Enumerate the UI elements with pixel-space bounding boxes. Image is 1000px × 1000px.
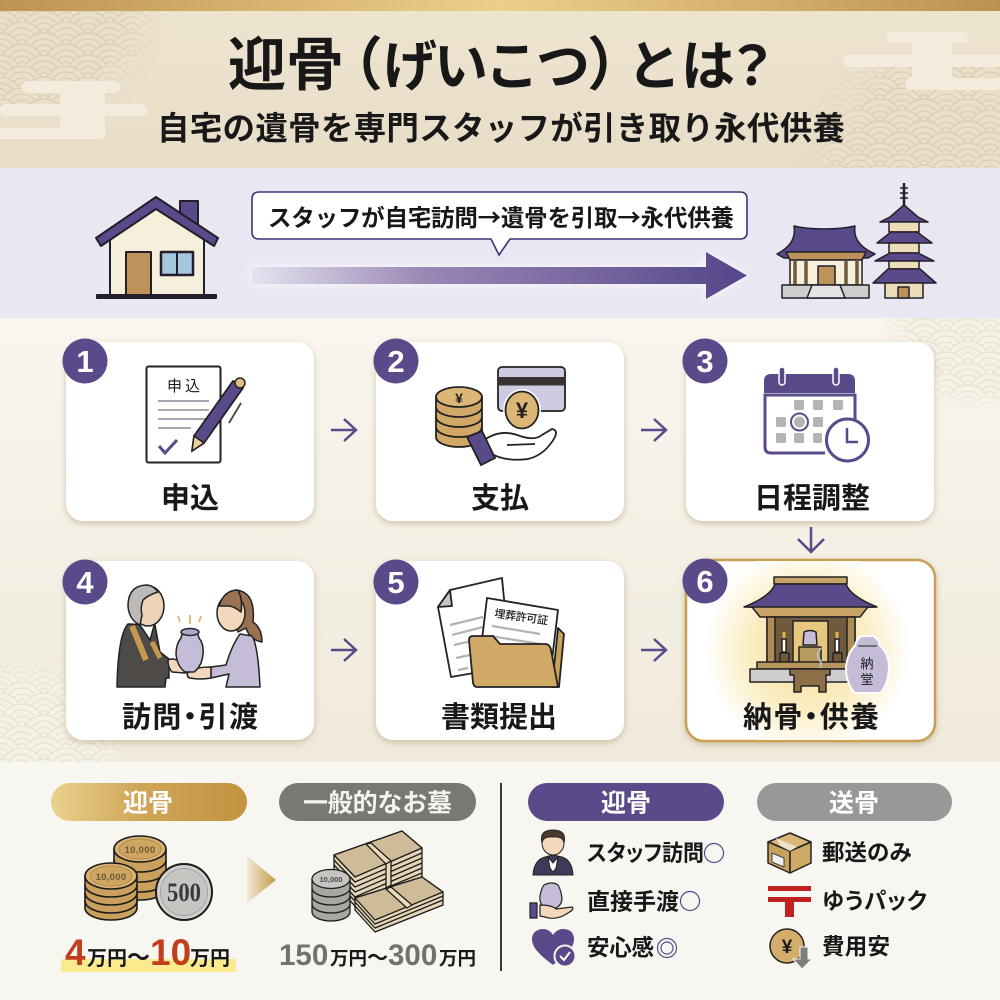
price: general grave: 〜	[367, 947, 388, 970]
title: 迎骨	[228, 33, 344, 98]
icon: hand holding urn	[530, 883, 573, 918]
icon: temple altar with urn: 納	[860, 656, 874, 671]
price: 迎骨: 万円	[190, 948, 230, 970]
arrow 3 to 6	[798, 527, 824, 552]
icon: gold coins: 500	[167, 878, 201, 907]
title: （	[325, 33, 383, 98]
text: direct handover: 直接手渡	[587, 888, 679, 914]
price: 迎骨: 万円	[87, 948, 127, 970]
label: 納骨・供養	[743, 701, 879, 734]
steps panel background	[0, 318, 1000, 762]
subtitle: 自宅の遺骨を専門スタッフが引き取り永代供養	[157, 110, 845, 146]
callout: スタッフが自宅訪問→遺骨を引取→永代供養	[268, 199, 734, 233]
divider	[500, 783, 502, 971]
price: general grave: 万円	[330, 948, 367, 969]
icon: yen coin with down arrow	[770, 929, 812, 969]
price: 迎骨	[61, 932, 236, 973]
mark: circle	[680, 892, 700, 910]
text: peace of mind: 安心感	[587, 936, 654, 960]
pill: 迎骨 comparison	[528, 783, 724, 821]
step number 6	[682, 558, 728, 604]
icon: documents and folder: 埋葬許可証	[494, 606, 549, 627]
icon: gold coins: 10,000	[96, 872, 126, 883]
step number 1: 1	[76, 344, 94, 379]
icon: application form and pen	[146, 366, 245, 462]
callout	[252, 192, 747, 255]
price: general grave: 万円	[439, 948, 476, 969]
step number 4: 4	[76, 565, 94, 600]
pill: 迎骨 cost: 迎骨	[123, 790, 173, 818]
step number 3	[682, 338, 728, 384]
icon: payment: ¥	[516, 398, 529, 423]
step number 2	[374, 338, 418, 384]
pill: general grave	[279, 783, 476, 821]
label: 訪問・引渡	[122, 701, 258, 734]
icon: payment	[436, 367, 565, 465]
icon: temple	[777, 226, 875, 298]
text: low cost: 費用安	[822, 935, 890, 960]
icon: temple altar with urn: 堂	[860, 672, 874, 687]
title: げいこつ	[383, 37, 590, 97]
gold arrow	[247, 856, 276, 903]
arrow 4 to 5	[331, 639, 356, 661]
step 2 card	[374, 338, 624, 521]
label: 支払	[471, 482, 529, 515]
icon: temple altar with urn	[744, 577, 888, 692]
step 4 card	[62, 560, 314, 740]
pill: 迎骨 comparison: 迎骨	[601, 790, 651, 818]
text: yu-pack: ゆうパック	[822, 889, 927, 914]
icon: postal mark	[768, 886, 811, 917]
icon: house	[96, 197, 218, 298]
step 6 highlighted card	[682, 547, 935, 753]
cost and comparison panel	[0, 762, 1000, 1000]
title: ？	[725, 37, 779, 97]
price: general grave: 300	[388, 939, 437, 972]
step 1 card	[62, 338, 314, 521]
title: とは	[627, 37, 735, 97]
icon: gold coins: 10,000	[125, 845, 155, 856]
arrow 5 to 6	[641, 639, 666, 661]
icon: documents and folder	[438, 578, 564, 687]
header panel	[0, 11, 1000, 168]
step number 3: 3	[696, 344, 714, 379]
step number 4	[62, 560, 108, 604]
icon: payment: ¥	[455, 390, 463, 406]
icon: calendar and clock	[764, 367, 868, 461]
mark: circle	[704, 844, 724, 862]
pill: 送骨 comparison: 送骨	[829, 790, 879, 818]
text: mail only: 郵送のみ	[822, 841, 912, 866]
title: ）	[587, 33, 645, 98]
step number 5	[374, 560, 418, 604]
icon: parcel box	[768, 833, 811, 873]
label: 日程調整	[754, 482, 870, 515]
icon: monk and woman handing over urn	[117, 585, 262, 687]
icon: heart with check	[532, 929, 576, 966]
price: 迎骨: 4	[65, 932, 86, 973]
label: 申込	[161, 482, 219, 515]
pill: general grave: 一般的なお墓	[303, 790, 452, 818]
icon: staff member	[533, 830, 573, 875]
label: 書類提出	[441, 701, 557, 734]
step number 5: 5	[387, 565, 405, 600]
step number 1	[62, 338, 108, 384]
pill: 送骨 comparison	[757, 783, 952, 821]
icon: gold coins	[85, 836, 212, 920]
icon: banknotes and silver coins: 10,000	[320, 875, 342, 884]
arrow 2 to 3	[641, 419, 666, 441]
step 5 card	[374, 560, 624, 740]
arrow	[252, 252, 747, 299]
top gold bar	[0, 0, 1000, 11]
band: home to temple flow	[0, 168, 1000, 318]
icon: application form and pen: 申込	[167, 375, 200, 396]
step 3 card	[682, 338, 934, 521]
step number 6: 6	[696, 564, 714, 599]
icon: pagoda	[873, 183, 936, 298]
price: general grave: 150	[279, 939, 328, 972]
text: staff visit: スタッフ訪問	[587, 841, 704, 866]
step number 2: 2	[387, 344, 405, 379]
icon: yen coin with down arrow: ¥	[782, 937, 793, 958]
arrow 1 to 2	[331, 419, 356, 441]
pill: 迎骨 cost	[51, 783, 247, 821]
mark: double circle	[658, 938, 676, 958]
icon: banknotes and silver coins	[312, 831, 443, 932]
price: 迎骨: 〜	[127, 944, 150, 970]
price: 迎骨: 10	[150, 932, 191, 973]
